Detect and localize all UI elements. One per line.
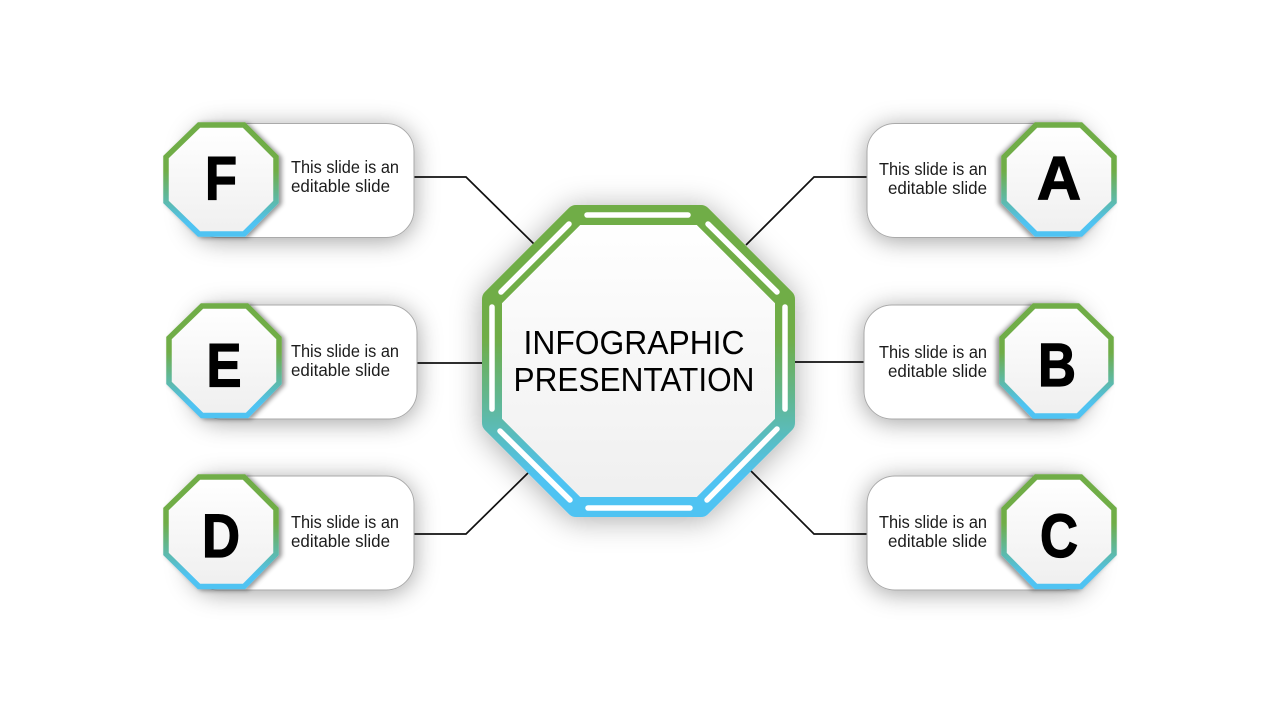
text A: This slide is an [879, 159, 987, 179]
letter E: E [206, 332, 242, 400]
card E [193, 305, 417, 419]
panel: A [867, 124, 1114, 238]
letter B: B [1038, 331, 1076, 399]
letter C: C [1040, 502, 1078, 570]
panel: D [166, 476, 414, 590]
text D: editable slide [291, 531, 390, 551]
connector: A to centre [746, 177, 867, 245]
icon: octagon A [1004, 125, 1114, 234]
ring highlights [492, 215, 785, 508]
connector: B to centre [794, 361, 864, 363]
icon: octagon C [1004, 477, 1114, 586]
card F [190, 124, 414, 238]
panel: B [864, 305, 1111, 419]
text A: editable slide [888, 178, 987, 198]
icon: octagon D [166, 477, 276, 586]
central heading: PRESENTATION [514, 362, 754, 399]
central heading: INFOGRAPHIC [524, 325, 744, 362]
panel: E [169, 305, 417, 419]
card D [190, 476, 414, 590]
text F: editable slide [291, 176, 390, 196]
central octagon ring [492, 215, 785, 507]
text E: This slide is an [291, 341, 399, 361]
text C: This slide is an [879, 512, 987, 532]
connector: E to centre [417, 362, 484, 364]
connector: C to centre [750, 470, 867, 534]
text C: editable slide [888, 531, 987, 551]
text E: editable slide [291, 360, 390, 380]
card A [867, 124, 1091, 238]
text F: This slide is an [291, 157, 399, 177]
panel: central octagon [492, 215, 785, 508]
text B: This slide is an [879, 342, 987, 362]
panel: F [166, 124, 414, 238]
card C [867, 476, 1091, 590]
letter A: A [1037, 144, 1081, 212]
panel: C [867, 476, 1114, 590]
icon: octagon F [166, 125, 276, 234]
letter F: F [205, 144, 237, 212]
text B: editable slide [888, 361, 987, 381]
icon: octagon E [169, 306, 279, 416]
letter D: D [202, 502, 240, 570]
text D: This slide is an [291, 512, 399, 532]
card B [864, 305, 1088, 419]
icon: octagon B [1002, 306, 1111, 416]
connector: D to centre [414, 472, 529, 534]
connector: F to centre [414, 177, 535, 245]
